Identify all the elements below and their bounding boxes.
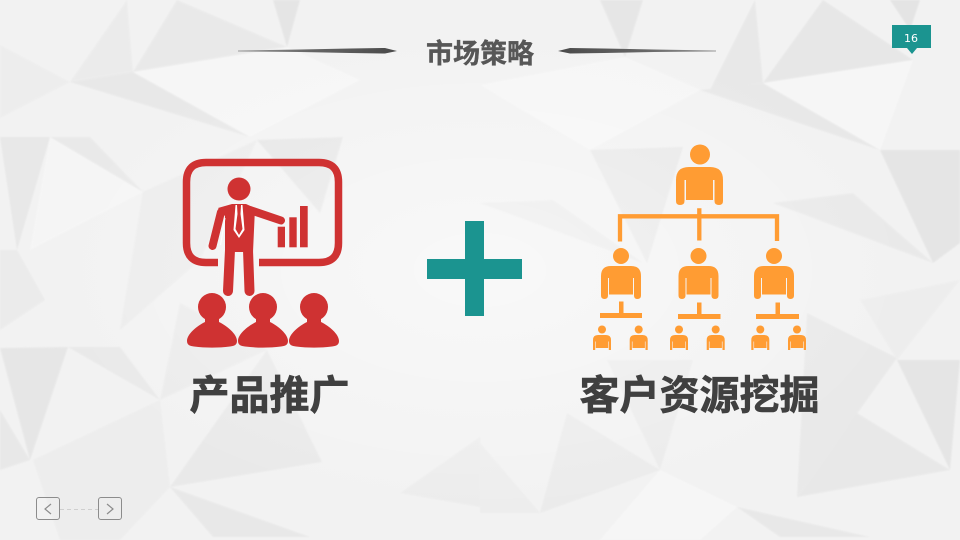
icon: presenter with audience — [186, 162, 339, 348]
bar chart — [278, 206, 308, 247]
title line: right — [558, 48, 716, 54]
top person — [676, 144, 723, 205]
label: product promotion: 产品推广 — [190, 374, 350, 418]
middle persons — [601, 248, 794, 299]
connectors — [620, 208, 777, 242]
sub connectors — [600, 302, 799, 319]
page number badge: 16 — [904, 32, 918, 45]
label: customer resource mining: 客户资源挖掘 — [580, 374, 820, 418]
title: 市场策略 — [426, 39, 534, 69]
page number badge — [892, 25, 931, 54]
title line: left — [238, 48, 397, 54]
presenter — [212, 178, 281, 291]
plus sign — [427, 221, 522, 316]
navigation arrows — [36, 498, 122, 520]
audience — [187, 293, 339, 348]
small persons — [593, 326, 806, 350]
icon: organisation chart — [593, 144, 806, 350]
presentation frame — [186, 162, 338, 262]
